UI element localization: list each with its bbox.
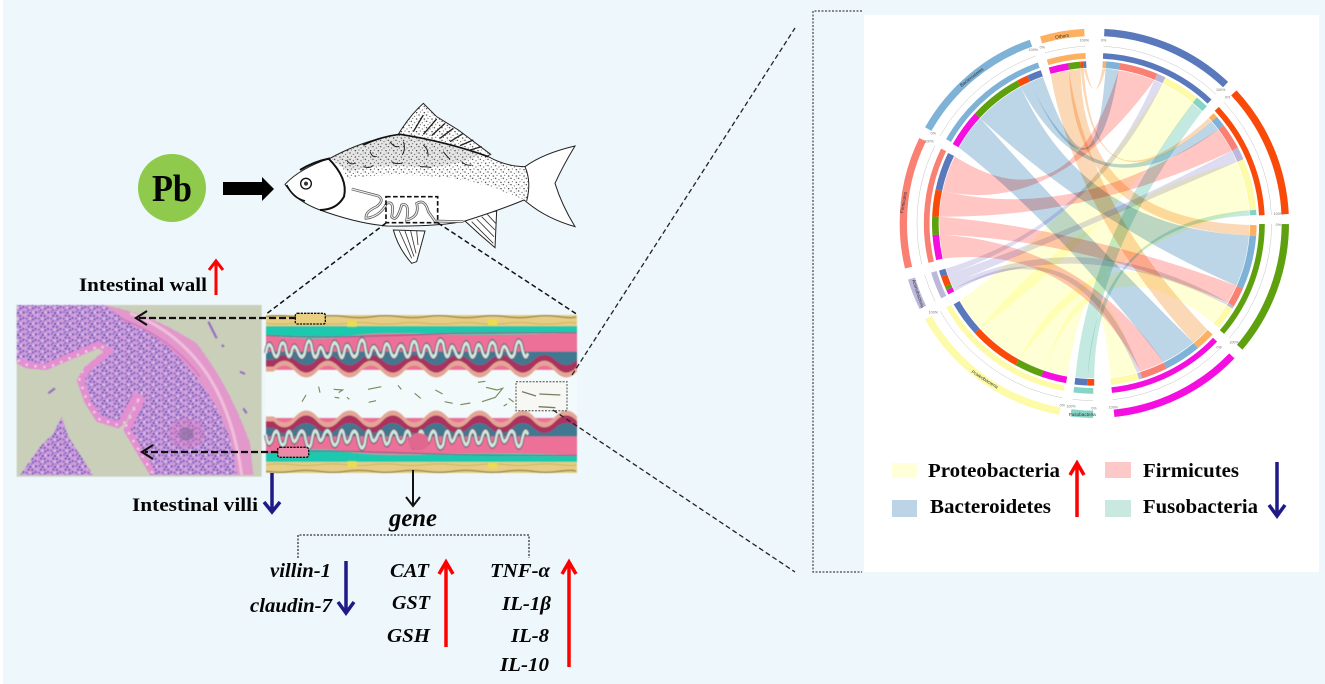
icon: intestine coil — [352, 189, 463, 222]
dashed box: wall region — [295, 313, 325, 324]
fish scale stipple — [330, 134, 529, 201]
scale tick labels: 100% — [929, 311, 939, 315]
icon: eye — [301, 178, 311, 189]
arrow: decreased phyla — [1269, 462, 1285, 516]
arrow: intestine to gene — [406, 470, 420, 506]
arrow: intestinal wall up — [209, 261, 223, 295]
gene group: inflammatory genes — [490, 560, 576, 676]
legend — [892, 460, 1285, 518]
lower-left tissue fragment — [20, 417, 93, 475]
dashed selection box on fish — [386, 197, 438, 223]
sector labels: Fusobacteria — [1069, 412, 1096, 417]
scale tick labels: 0% — [1091, 406, 1097, 410]
scale tick labels — [924, 38, 1284, 410]
arrow: intestinal villi down — [264, 473, 280, 512]
gene group: inflammatory genes: IL-1β — [501, 593, 552, 615]
arrow: dashed to wall layer — [136, 311, 296, 325]
chord diagram — [899, 32, 1285, 417]
scale tick labels: 0% — [1060, 404, 1066, 408]
arrow: antioxidant genes up — [439, 562, 453, 647]
intestine cross section — [266, 313, 577, 473]
sector labels: Others — [1055, 33, 1070, 40]
icon: gill cover — [320, 158, 345, 210]
label: Intestinal villi: Intestinal villi — [132, 495, 258, 516]
gene group: inflammatory genes: IL-8 — [510, 625, 549, 647]
mucosa tissue — [16, 304, 254, 476]
label: Intestinal wall: Intestinal wall — [79, 275, 207, 296]
scale tick labels: 100% — [1029, 48, 1039, 52]
arrow: increased phyla — [1070, 463, 1084, 517]
scale tick labels: 0% — [1101, 39, 1107, 43]
gene group: barrier genes — [250, 560, 354, 617]
sector labels: Bacteroidetes — [959, 66, 985, 88]
icon: fish illustration — [285, 103, 575, 263]
arrow: dashed to villi layer — [142, 445, 278, 459]
dashed box: microbiota region — [516, 382, 567, 411]
outer sector ring — [903, 32, 1285, 414]
scale tick labels: 100% — [1274, 212, 1284, 216]
scale tick labels: 100% — [1109, 405, 1119, 409]
scale arcs — [917, 46, 1272, 401]
icon: dorsal fin — [398, 103, 491, 159]
icon: anal fin — [465, 211, 497, 248]
icon: fish body and tail — [285, 134, 575, 227]
gene group: antioxidant genes: CAT — [390, 560, 430, 582]
scale tick labels: 100% — [1066, 405, 1076, 409]
middle sector ring — [927, 56, 1262, 391]
muscular wall layer — [103, 305, 253, 475]
sector labels — [899, 33, 1096, 417]
arrow: inflammatory genes up — [562, 562, 576, 667]
legend item: Proteobacteria: Proteobacteria — [928, 460, 1060, 482]
scale tick labels: 0% — [1216, 346, 1222, 350]
legend item: Fusobacteria: Fusobacteria — [1143, 496, 1258, 518]
legend item: Firmicutes: Firmicutes — [1143, 460, 1239, 482]
gene group: antioxidant genes — [387, 560, 453, 647]
scale tick labels: 0% — [1040, 45, 1046, 49]
gene group: antioxidant genes: GST — [392, 592, 431, 614]
scale tick labels: 100% — [1080, 38, 1090, 42]
icon: Pb lead source — [138, 154, 206, 222]
scale tick labels: 0% — [931, 131, 937, 135]
stray cells — [48, 322, 247, 413]
icon: pelvic fin — [393, 230, 425, 263]
scale tick labels: 0% — [1225, 95, 1231, 99]
sector labels: Actinobacteria — [911, 279, 925, 309]
gene group: antioxidant genes: GSH — [387, 625, 432, 647]
bracket: gene groups — [298, 535, 529, 558]
histology micrograph — [10, 300, 270, 482]
gene group: barrier genes: claudin-7 — [250, 595, 333, 617]
legend item: Firmicutes — [1105, 460, 1239, 482]
lumen — [266, 370, 577, 417]
icon: Pb lead source: Pb — [152, 168, 192, 210]
scale tick labels: 0% — [1276, 223, 1282, 227]
scale tick labels: 100% — [924, 140, 934, 144]
label: gene: gene — [388, 505, 437, 532]
villus edge — [17, 348, 150, 475]
panel: microbiota — [864, 15, 1319, 572]
gene group: inflammatory genes: TNF-α — [490, 560, 551, 582]
sector labels: Proteobacteria — [971, 369, 999, 390]
lower wall — [266, 410, 577, 473]
gene group: inflammatory genes: IL-10 — [499, 654, 549, 676]
arrow: barrier genes down — [338, 561, 354, 613]
dashed box: villi region — [278, 447, 309, 457]
inner segmented ring — [935, 64, 1253, 382]
sector labels: Firmicutes — [899, 191, 908, 213]
dotted bracket around chord panel — [813, 11, 862, 572]
lumen microbiota debris — [302, 381, 514, 406]
upper wall — [266, 315, 577, 378]
legend item: Bacteroidetes: Bacteroidetes — [930, 496, 1051, 518]
arrow: Pb to fish — [223, 177, 274, 201]
scale tick labels: 100% — [1229, 341, 1239, 345]
zoom guide lines to chord panel — [553, 28, 795, 572]
gene group: barrier genes: villin-1 — [270, 560, 331, 582]
scale tick labels: 100% — [1216, 88, 1226, 92]
chord ribbons — [939, 69, 1249, 378]
zoom guide lines from fish — [265, 223, 578, 315]
